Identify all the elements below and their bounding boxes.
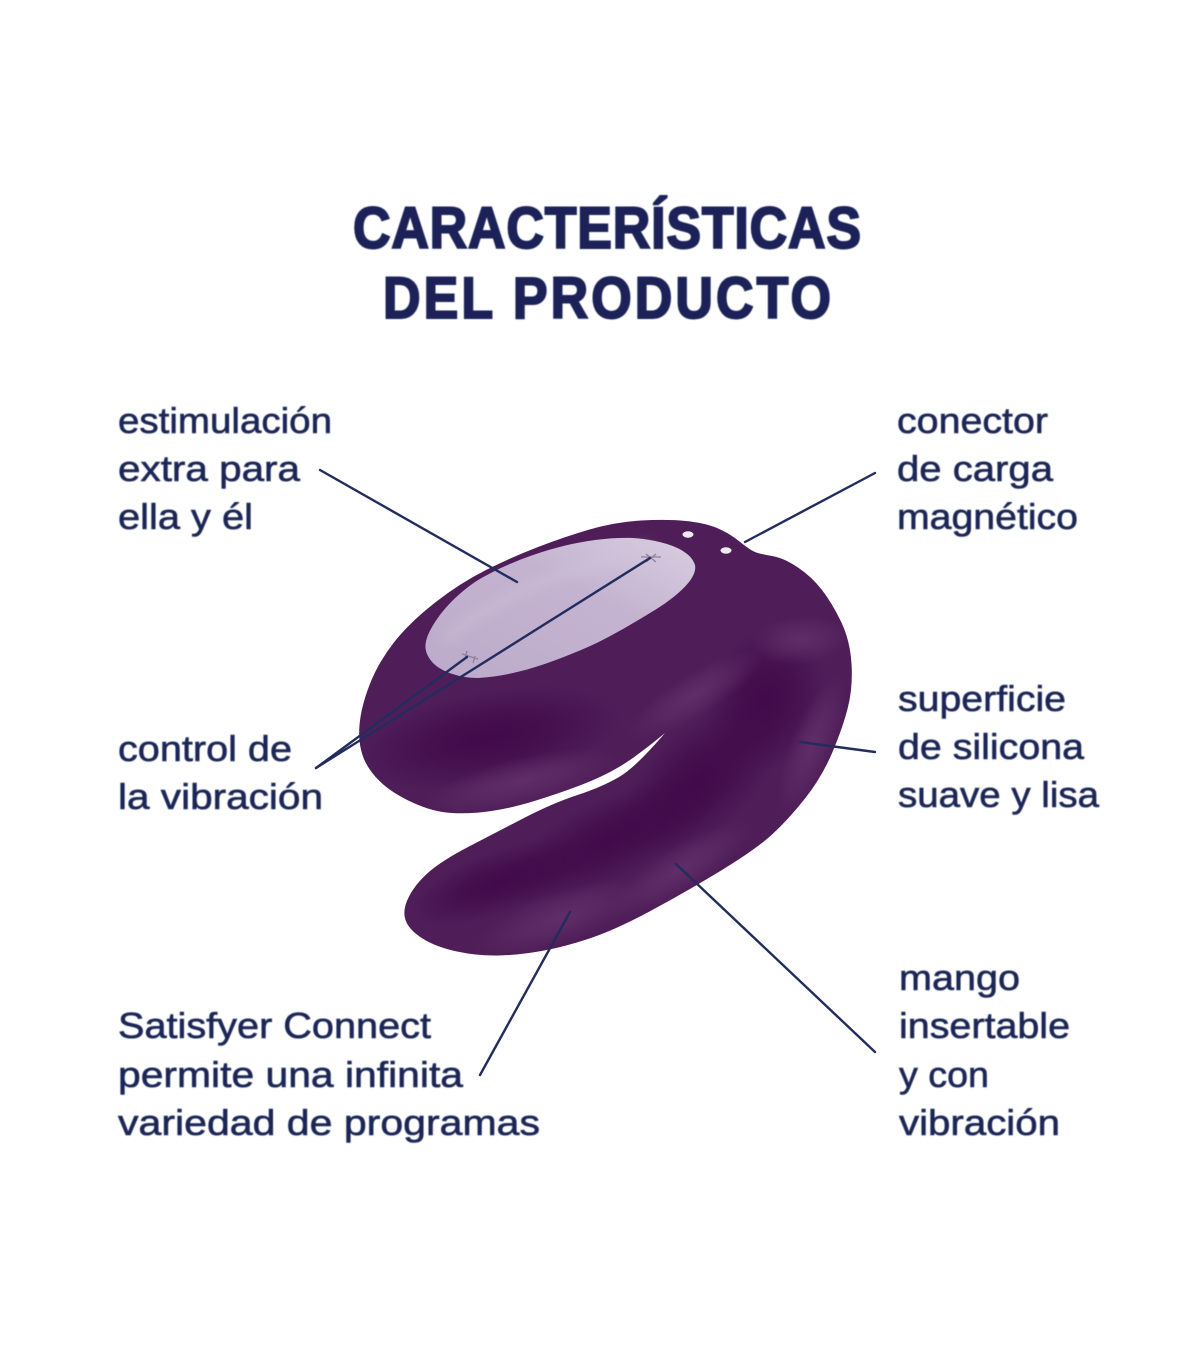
label: control de la vibración — [118, 728, 323, 817]
label: conector de carga: conector — [897, 400, 1048, 441]
title: DEL PRODUCTO — [383, 265, 831, 331]
charging contact dots — [682, 531, 732, 554]
label: estimulación extra — [118, 400, 332, 537]
label: conector de carga: magnético — [897, 496, 1078, 537]
title: CARACTERÍSTICAS — [353, 195, 861, 261]
label: estimulación extra: ella y él — [118, 496, 253, 537]
label: conector de carga — [897, 400, 1078, 537]
label: superficie de silicona — [898, 678, 1100, 815]
label: Satisfyer Connect: permite una infinita — [118, 1054, 464, 1095]
label: conector de carga: de carga — [897, 448, 1054, 489]
label: superficie de silicona: suave y lisa — [898, 774, 1100, 815]
label: estimulación extra: extra para — [118, 448, 301, 489]
infographic canvas — [117, 194, 1100, 1144]
label: superficie de silicona: superficie — [898, 678, 1066, 719]
label: estimulación extra: estimulación — [118, 400, 332, 441]
panel highlight — [445, 548, 650, 640]
label: Satisfyer Connect — [118, 1005, 540, 1143]
label: mango insertable: y con — [899, 1054, 989, 1095]
lilac control panel — [425, 538, 695, 678]
label: Satisfyer Connect: Satisfyer Connect — [118, 1005, 431, 1046]
label: mango insertable: insertable — [899, 1005, 1070, 1046]
label: control de la vibración: la vibración — [118, 776, 323, 817]
label: control de la vibración: control de — [118, 728, 292, 769]
title — [353, 195, 861, 331]
label: superficie de silicona: de silicona — [898, 726, 1085, 767]
leader lines — [316, 470, 875, 1075]
label: mango insertable: mango — [899, 957, 1020, 998]
label: mango insertable — [899, 957, 1070, 1143]
label: Satisfyer Connect: variedad de programas — [118, 1102, 540, 1143]
control buttons marks — [462, 554, 661, 663]
product illustration — [359, 520, 852, 956]
label: mango insertable: vibración — [899, 1102, 1060, 1143]
